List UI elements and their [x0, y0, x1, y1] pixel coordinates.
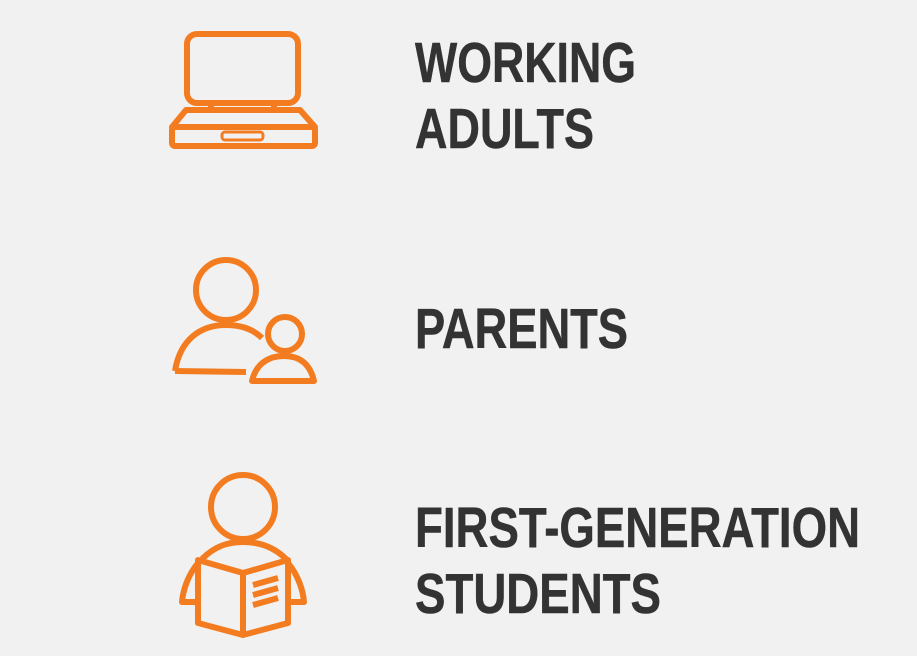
heading: working adults: ADULTS [415, 97, 594, 161]
heading: working adults: WORKING [415, 31, 636, 95]
heading: first-generation students [415, 496, 860, 626]
heading: working adults [415, 31, 636, 161]
heading: parents: PARENTS [415, 297, 628, 361]
icon: parents [175, 260, 314, 381]
icon: student reading [182, 475, 304, 635]
icon: laptop [172, 34, 315, 146]
heading: first-generation students: STUDENTS [415, 562, 661, 626]
